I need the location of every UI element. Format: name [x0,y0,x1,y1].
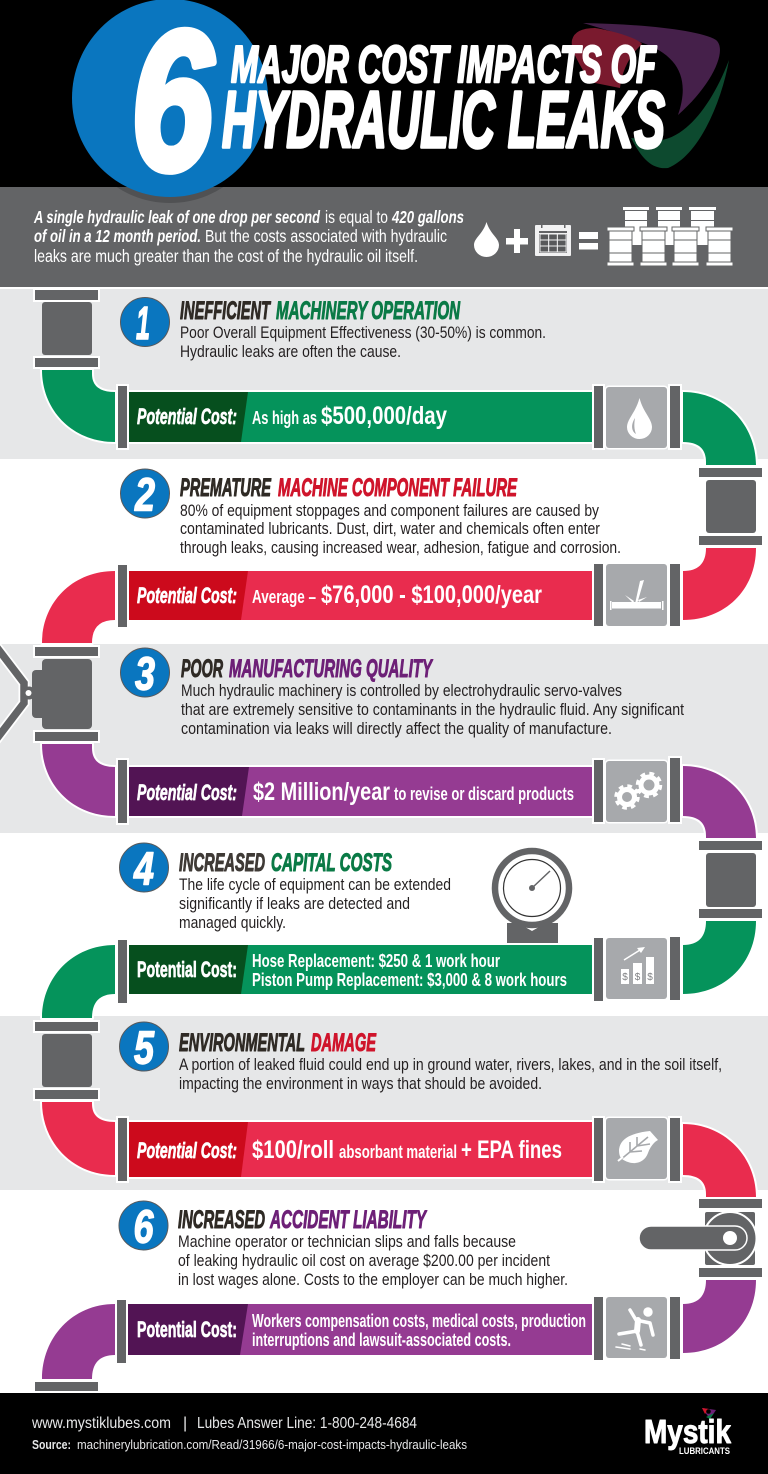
body text 6: in lost wages alone. Costs to the employer can be much higher. [178,1271,568,1289]
pipe fittings [118,937,680,1003]
potential cost 3 [137,778,574,806]
pipe: green bar [124,945,596,994]
potential cost 2 [137,581,542,609]
pipe: red bar [124,1122,596,1177]
number badge 2: 2 [134,468,155,520]
title [222,36,665,164]
number badge 1 [120,297,170,349]
heading 2 accent: MACHINE COMPONENT FAILURE [278,474,518,502]
body text 4: managed quickly. [179,914,286,932]
potential cost 5: Potential Cost: [137,1138,237,1163]
icon: barrels [607,207,733,266]
pipe: ball valve with handle [639,1199,762,1277]
icon: drop plus calendar equals barrels [474,207,733,266]
icon: rising cost chart [621,947,654,984]
pipe fittings [118,564,680,627]
body text 3: Much hydraulic machinery is controlled by electrohydraulic servo-valves [181,682,622,700]
intro text: is equal to [325,207,388,227]
panel: cost 5 [35,1022,756,1197]
pipe: red bar [124,571,596,620]
body text 4: The life cycle of equipment can be extended [179,876,451,894]
potential cost 4: Piston Pump Replacement: $3,000 & 8 work hours [252,970,567,990]
number badge 5 [120,1022,168,1074]
body text 1 [180,324,546,361]
body text 3 [181,682,684,738]
heading 5: ENVIRONMENTAL [179,1029,305,1057]
intro band background [0,187,768,287]
number badge 6 [119,1200,168,1252]
heading 6: INCREASED [178,1206,265,1234]
potential cost 2: $76,000 - $100,000/year [321,581,542,609]
label tab [127,1304,248,1355]
icon: component crack [610,580,664,610]
body text 2: 80% of equipment stoppages and component failures are caused by [180,502,600,520]
label tab [127,392,248,442]
watermark logo swoosh [572,23,729,168]
potential cost 5 [137,1136,562,1164]
pipe: red left elbow [42,571,115,643]
heading 4: INCREASED [179,849,265,877]
pipe: purple left elbow [42,1304,115,1379]
pipe: valve with lever [0,645,98,741]
pipe: green right elbow [683,921,756,994]
potential cost 1: $500,000/day [321,402,447,430]
icon: gears [616,774,660,808]
body text 5: impacting the environment in ways that should be avoided. [179,1075,542,1093]
heading 1 accent: MACHINERY OPERATION [276,297,461,325]
potential cost 1: As high as [252,408,317,428]
pipe fittings [118,1118,680,1181]
body text 2 [180,502,621,557]
potential cost 2: Potential Cost: [137,583,237,608]
icon: rising cost chart: $ [635,972,641,983]
potential cost 4: Hose Replacement: $250 & 1 work hour [252,951,500,971]
pipe: green left elbow [42,370,115,442]
pipe: valve body left [35,1022,98,1099]
panel: cost 1 [35,290,756,465]
potential cost 1: Potential Cost: [137,404,237,429]
footer contact line: | [183,1415,187,1432]
pipe: red left elbow [42,1102,115,1175]
panel: cost 4 [42,841,762,1018]
body text 2: through leaks, causing increased wear, adhesion, fatigue and corrosion. [180,539,621,557]
label tab [127,767,249,816]
body text 4 [179,876,451,932]
potential cost 6: Workers compensation costs, medical costs, production [252,1311,586,1331]
footer source line: machinerylubrication.com/Read/31966/6-major-cost-impacts-hydraulic-leaks [77,1437,467,1452]
pipe: purple bar [124,767,596,816]
icon: rising cost chart: $ [647,972,653,983]
potential cost 3: to revise or discard products [394,784,574,804]
icon: oil drop [627,398,652,439]
header background [0,0,768,187]
pipe fittings [117,1297,680,1363]
potential cost 4 [137,951,567,990]
pipe: green left elbow [42,945,115,1018]
mystik logo: Mystik [644,1413,732,1450]
intro text: 420 gallons [391,207,464,227]
footer contact line [31,1415,417,1432]
potential cost 5: + EPA fines [461,1136,562,1164]
body text 6: Machine operator or technician slips and falls because [178,1233,516,1251]
number badge 4: 4 [133,842,154,894]
footer [0,1393,768,1474]
panel: cost 6 [35,1199,762,1391]
pipe: purple right elbow [683,766,756,838]
pipe fittings [118,386,680,448]
number badge 6: 6 [134,1200,154,1252]
label tab [127,1122,248,1177]
potential cost 2: Average – [252,587,316,607]
body text 2: contaminated lubricants. Dust, dirt, water and chemicals often enter [180,520,600,538]
potential cost 3: $2 Million/year [253,778,390,806]
pipe: red right elbow [683,1124,756,1197]
number badge 1: 1 [136,297,150,349]
potential cost 1 [137,402,447,430]
number badge 4 [120,842,168,894]
potential cost 6: interruptions and lawsuit-associated costs. [252,1330,511,1350]
pipe: green bar [124,392,596,442]
heading 4 accent: CAPITAL COSTS [271,849,392,877]
icon: person slipping [616,1307,653,1350]
big blue circle [72,0,268,197]
intro text: But the costs associated with hydraulic [205,226,447,246]
panel: cost 3 [0,645,756,838]
pipe: red right elbow [683,548,756,620]
potential cost 5: absorbant material [339,1142,457,1162]
number badge 3 [120,648,170,700]
body text 3: contamination via leaks will directly affect the quality of manufacture. [181,720,612,738]
footer source line: Source: [32,1437,71,1452]
number badge 3: 3 [135,648,155,700]
potential cost 3: Potential Cost: [137,780,237,805]
intro text: leaks are much greater than the cost of the hydraulic oil itself. [34,246,418,266]
body text 6: of leaking hydraulic oil cost on average $200.00 per incident [178,1252,550,1270]
mystik logo: LUBRICANTS [679,1446,730,1456]
intro text: A single hydraulic leak of one drop per second [33,207,320,227]
heading 3: POOR [181,655,223,683]
body text 4: significantly if leaks are detected and [179,895,410,913]
intro text [33,207,464,266]
label tab [127,571,248,620]
potential cost 6 [137,1311,586,1350]
icon: rising cost chart: $ [622,972,628,983]
label tab [127,945,248,994]
body text 1: Poor Overall Equipment Effectiveness (30-50%) is common. [180,324,546,342]
pipe: green right elbow [683,392,756,465]
pipe: purple bar [124,1304,596,1355]
footer contact line: Lubes Answer Line: 1-800-248-4684 [197,1415,417,1432]
heading 3 accent: MANUFACTURING QUALITY [229,655,433,683]
heading 5 accent: DAMAGE [311,1029,377,1057]
mystik logo [644,1408,732,1456]
body text 1: Hydraulic leaks are often the cause. [180,343,401,361]
number badge 5: 5 [134,1022,155,1074]
bottom flange [35,1382,98,1391]
pipe: valve body right [699,468,762,545]
pipe: valve body right [699,841,762,918]
pipe fittings [118,758,680,823]
potential cost 5: $100/roll [252,1136,334,1164]
icon: leaf [618,1131,658,1163]
panel: cost 2 [42,468,762,643]
body text 3: that are extremely sensitive to contaminants in the hydraulic fluid. Any significant [181,701,684,719]
heading 1: INEFFICIENT [180,297,272,325]
pipe: valve body left [35,290,98,367]
icon: pressure gauge [495,851,569,945]
heading 6 accent: ACCIDENT LIABILITY [269,1206,427,1234]
intro text: of oil in a 12 month period. [34,226,201,246]
body text 5 [179,1056,722,1093]
number badge 2 [120,468,170,520]
footer contact line: www.mystiklubes.com [31,1415,171,1432]
big blue circle shadow [117,187,223,203]
pipe: purple left elbow [42,744,115,816]
potential cost 6: Potential Cost: [137,1317,237,1342]
heading 2: PREMATURE [180,474,272,502]
pipe: purple right elbow [683,1280,756,1353]
body text 6 [178,1233,568,1289]
potential cost 4: Potential Cost: [137,957,237,982]
section backgrounds [0,287,768,1393]
